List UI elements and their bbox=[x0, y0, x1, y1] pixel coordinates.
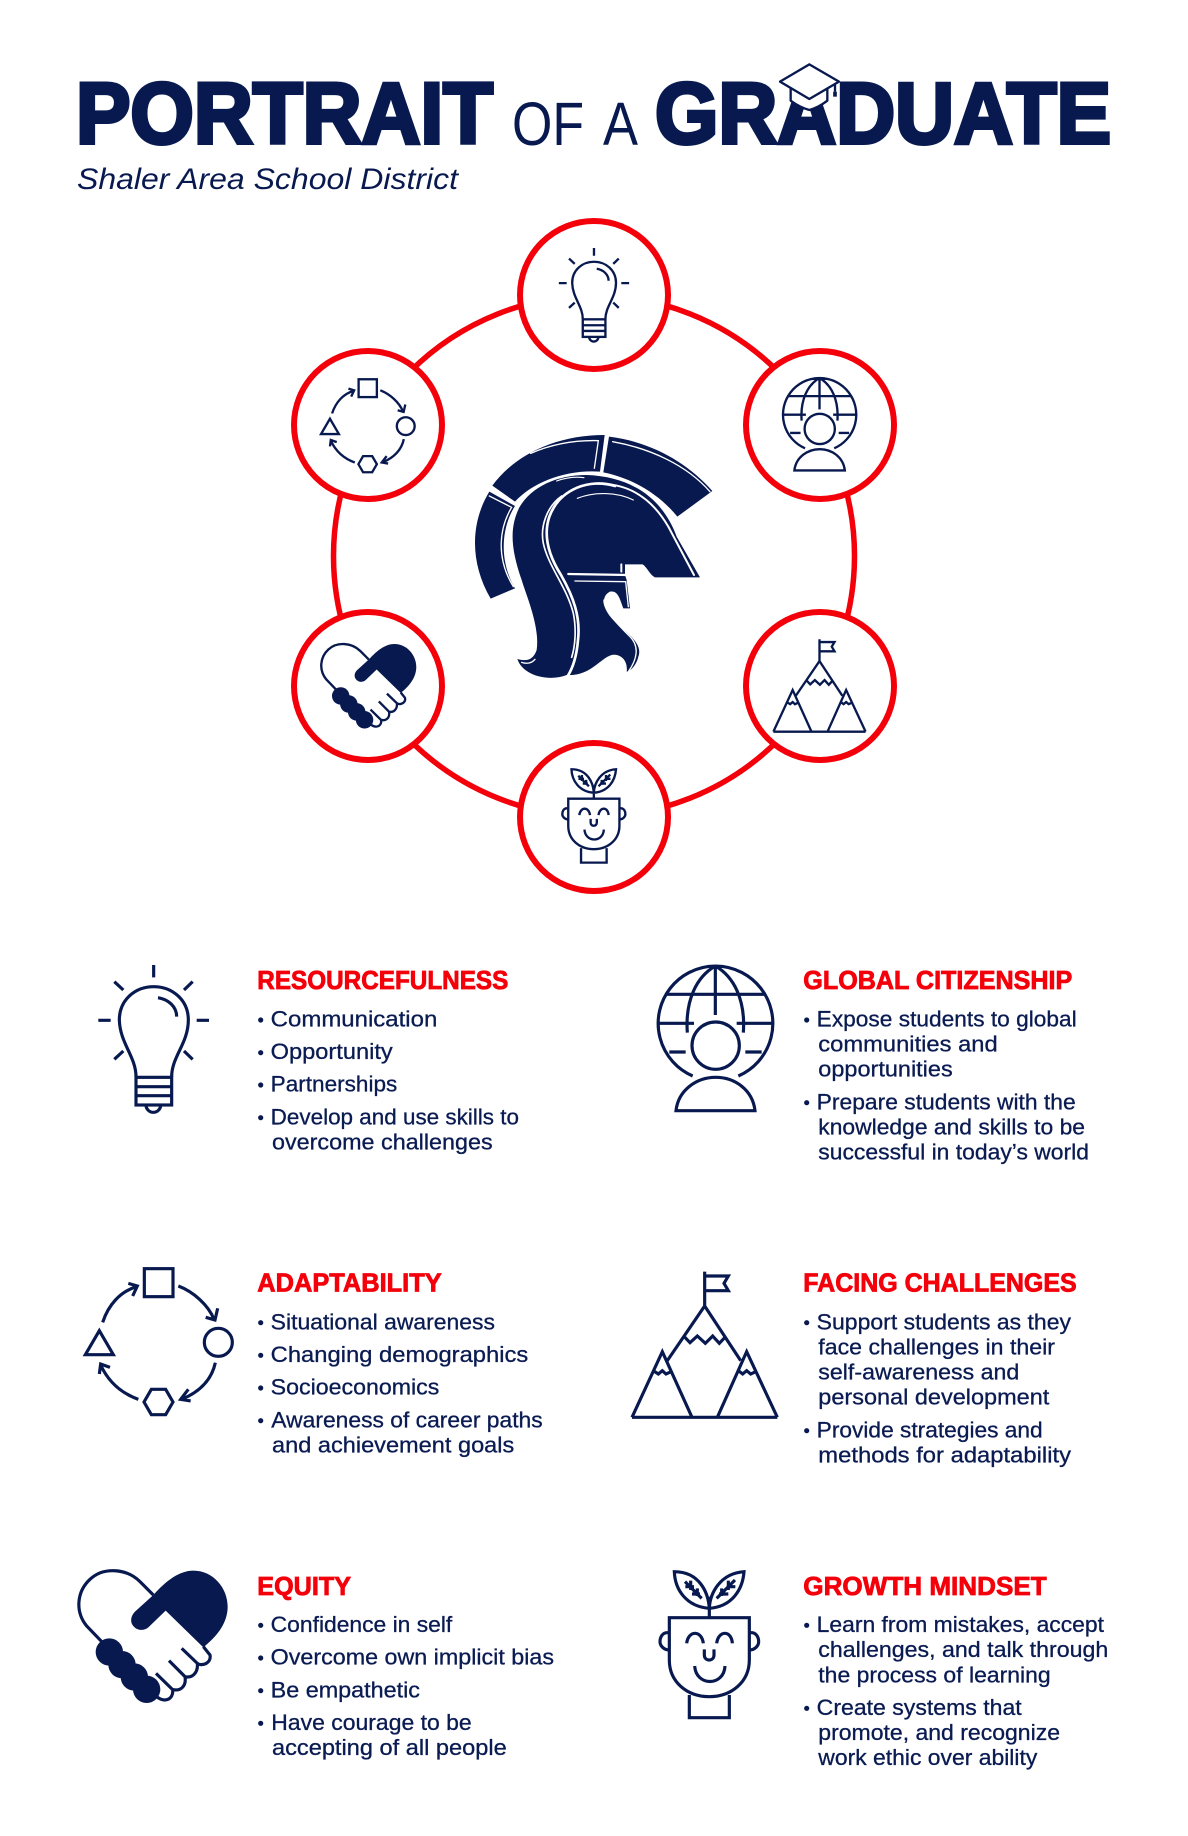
icon: handshake heart bbox=[79, 1571, 228, 1703]
list: resourcefulness bbox=[258, 1007, 519, 1154]
logo: trojan helmet bbox=[475, 435, 712, 678]
heading: equity: EQUITY bbox=[257, 1571, 351, 1601]
list: equity: Confidence in self bbox=[271, 1612, 453, 1637]
icon: lightbulb bbox=[98, 965, 209, 1112]
list: facing challenges: Provide strategies and bbox=[817, 1417, 1043, 1442]
subtitle: Shaler Area School District bbox=[77, 163, 460, 196]
list: global citizenship: successful in today’s world bbox=[818, 1139, 1089, 1164]
title: A bbox=[603, 90, 638, 158]
panel: growth mindset bbox=[660, 1571, 1108, 1770]
list: facing challenges: methods for adaptability bbox=[818, 1442, 1071, 1467]
list: equity: Overcome own implicit bias bbox=[271, 1645, 554, 1670]
node: lightbulb bbox=[520, 221, 668, 369]
list: adaptability: and achievement goals bbox=[272, 1432, 514, 1457]
panel: adaptability bbox=[85, 1268, 543, 1457]
node: growth head bbox=[520, 743, 668, 891]
title bbox=[76, 66, 1111, 162]
node: globe bbox=[746, 351, 894, 499]
list: adaptability: Situational awareness bbox=[271, 1309, 495, 1334]
ring diagram bbox=[294, 221, 894, 891]
list: global citizenship: opportunities bbox=[818, 1057, 953, 1082]
list: facing challenges bbox=[804, 1309, 1071, 1467]
list: facing challenges: Support students as they bbox=[817, 1309, 1071, 1334]
list: resourcefulness: Develop and use skills to bbox=[271, 1104, 519, 1129]
list: growth mindset: Create systems that bbox=[817, 1695, 1022, 1720]
heading: facing challenges: FACING CHALLENGES bbox=[803, 1268, 1077, 1298]
icon: graduation cap bbox=[780, 64, 839, 110]
icon: small lightbulb bbox=[559, 248, 629, 342]
list: resourcefulness: overcome challenges bbox=[272, 1129, 493, 1154]
title: OF bbox=[512, 90, 584, 158]
list: growth mindset: the process of learning bbox=[818, 1662, 1051, 1687]
icon: small handshake bbox=[321, 644, 416, 729]
panel: equity bbox=[79, 1571, 554, 1760]
list: adaptability: Socioeconomics bbox=[271, 1375, 439, 1400]
title: PORTRAIT bbox=[76, 66, 493, 162]
node: handshake heart bbox=[294, 612, 442, 760]
list: growth mindset: Learn from mistakes, accept bbox=[817, 1612, 1104, 1637]
heading: adaptability: ADAPTABILITY bbox=[257, 1268, 442, 1298]
heading: global citizenship: GLOBAL CITIZENSHIP bbox=[803, 965, 1072, 995]
list: adaptability: Changing demographics bbox=[271, 1342, 528, 1367]
list: growth mindset: promote, and recognize bbox=[818, 1720, 1060, 1745]
title: GRADUATE bbox=[655, 66, 1111, 162]
heading: growth mindset: GROWTH MINDSET bbox=[803, 1571, 1047, 1601]
list: equity: Have courage to be bbox=[271, 1710, 472, 1735]
list: global citizenship: Expose students to global bbox=[817, 1007, 1077, 1032]
list: adaptability bbox=[258, 1309, 543, 1457]
panel: global citizenship bbox=[658, 965, 1089, 1164]
panel: facing challenges bbox=[632, 1268, 1077, 1467]
node: adaptability cycle bbox=[294, 351, 442, 499]
list: facing challenges: face challenges in their bbox=[818, 1335, 1055, 1360]
list: global citizenship: knowledge and skills to be bbox=[818, 1114, 1085, 1139]
icon: small cycle bbox=[321, 379, 415, 472]
heading: resourcefulness: RESOURCEFULNESS bbox=[257, 965, 508, 995]
list: adaptability: Awareness of career paths bbox=[271, 1407, 543, 1432]
list: equity bbox=[258, 1612, 554, 1760]
list: resourcefulness: Partnerships bbox=[271, 1072, 397, 1097]
icon: small globe bbox=[783, 378, 856, 470]
list: global citizenship: communities and bbox=[818, 1032, 998, 1057]
list: resourcefulness: Opportunity bbox=[271, 1039, 393, 1064]
list: growth mindset bbox=[804, 1612, 1108, 1770]
list: growth mindset: work ethic over ability bbox=[817, 1745, 1037, 1770]
list: facing challenges: personal development bbox=[818, 1385, 1049, 1410]
icon: cycle of shapes bbox=[85, 1269, 232, 1415]
icon: small head with sprout bbox=[562, 769, 625, 863]
node: mountain bbox=[746, 612, 894, 760]
list: resourcefulness: Communication bbox=[271, 1007, 437, 1032]
list: global citizenship bbox=[804, 1007, 1089, 1164]
panel: resourcefulness bbox=[98, 965, 519, 1154]
icon: mountain with flag bbox=[632, 1272, 777, 1417]
icon: globe bbox=[658, 966, 773, 1111]
list: growth mindset: challenges, and talk through bbox=[818, 1637, 1108, 1662]
icon: small mountain bbox=[773, 639, 866, 732]
icon: head with sprout bbox=[660, 1572, 759, 1718]
list: equity: Be empathetic bbox=[271, 1677, 420, 1702]
list: global citizenship: Prepare students with the bbox=[817, 1089, 1076, 1114]
list: facing challenges: self-awareness and bbox=[818, 1360, 1019, 1385]
list: equity: accepting of all people bbox=[272, 1735, 507, 1760]
